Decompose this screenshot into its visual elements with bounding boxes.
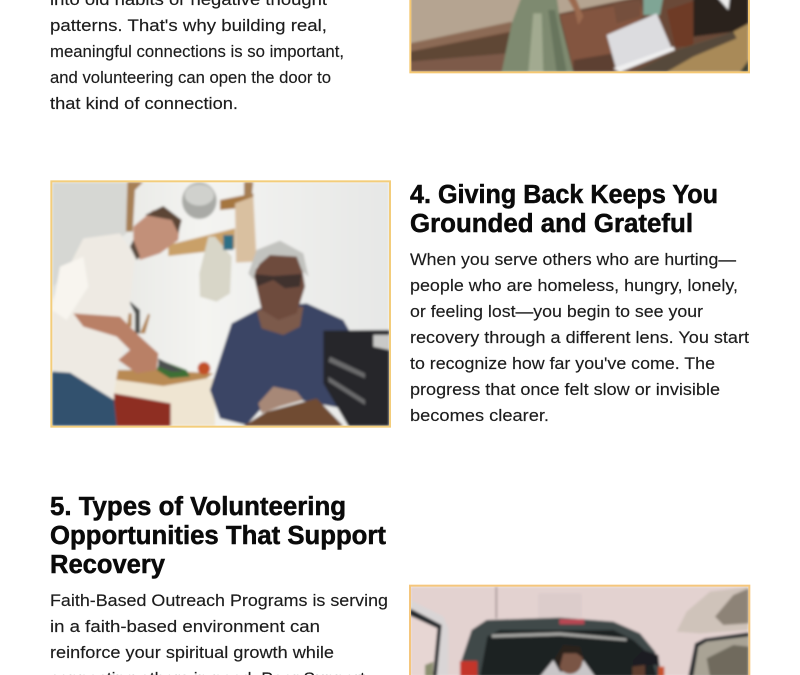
section 5 heading: Opportunities That Support: [50, 522, 387, 550]
right van door: [688, 632, 749, 675]
person in van: [540, 660, 595, 675]
section 4 heading: Grounded and Grateful: [410, 210, 693, 238]
text block: section 3 closing paragraph: that kind of connection.: [50, 94, 238, 113]
section 4 body text: or feeling lost—you begin to see your: [410, 302, 703, 321]
left van door: [410, 600, 448, 675]
van body: [460, 618, 663, 675]
photo: people on a wooden boat: [410, 0, 749, 72]
text block: section 3 closing paragraph: [50, 0, 344, 113]
section 4 body text: recovery through a different lens. You start: [410, 328, 749, 347]
section 4 body text: becomes clearer.: [410, 406, 549, 425]
utensils: [128, 300, 140, 333]
wooden rack: [126, 182, 143, 232]
older man: [210, 303, 357, 425]
photo: two people unloading the back of a van: [410, 586, 749, 675]
section 5 heading: 5. Types of Volunteering: [50, 493, 346, 521]
person with cap: [644, 651, 660, 666]
section 4 heading: 4. Giving Back Keeps You: [410, 181, 718, 209]
section 5 body text: in a faith-based environment can: [50, 617, 320, 636]
young man: [52, 233, 135, 398]
section 4 body text: to recognize how far you've come. The: [410, 354, 715, 373]
crate: [323, 330, 389, 426]
section 5 body text: [50, 591, 388, 675]
text block: section 3 closing paragraph: and volunteering can open the door to: [50, 68, 331, 87]
section 5 body text: reinforce your spiritual growth while: [50, 643, 334, 662]
section 5 heading: Recovery: [50, 551, 166, 579]
section 4 body text: progress that once felt slow or invisible: [410, 380, 720, 399]
section 4 heading: [410, 181, 718, 238]
counter and cabinet: [112, 378, 215, 426]
section 4 body text: When you serve others who are hurting—: [410, 250, 736, 269]
text block: section 3 closing paragraph: patterns. That's why building real,: [50, 16, 327, 35]
section 4 body text: [410, 250, 749, 425]
photo: young man cooking beside an older man in a kitchen: [51, 181, 390, 427]
text block: section 3 closing paragraph: meaningful connections is so important,: [50, 42, 344, 61]
section 5 body text: Faith-Based Outreach Programs is serving: [50, 591, 388, 610]
section 5 heading: [50, 493, 387, 579]
section 4 body text: people who are homeless, hungry, lonely,: [410, 276, 738, 295]
